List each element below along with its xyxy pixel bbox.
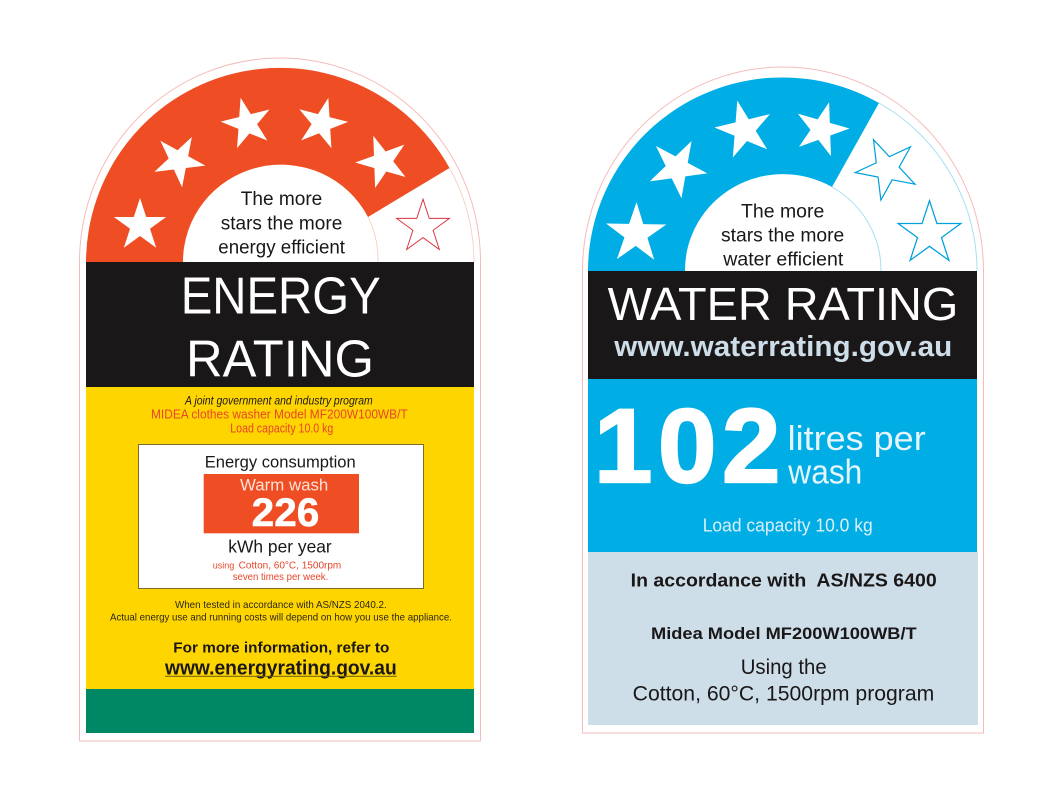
program and model text <box>151 395 408 435</box>
arc caption: stars the more <box>721 225 844 247</box>
arc caption: energy efficient <box>218 236 346 258</box>
outline star <box>397 199 449 249</box>
energy consumption box: seven times per week. <box>233 572 328 583</box>
program and model text: MIDEA clothes washer Model MF200W100WB/T <box>151 406 408 421</box>
energy consumption box: using <box>213 560 234 571</box>
black title band <box>588 271 977 379</box>
program and model text: A joint government and industry program <box>184 395 373 407</box>
panel: water rating label <box>582 67 984 733</box>
energy consumption box: kWh per year <box>228 537 332 557</box>
website reference: For more information, refer to <box>173 639 389 656</box>
water consumption figure: wash <box>787 453 862 491</box>
model: Midea Model MF200W100WB/T <box>651 625 917 643</box>
arc caption <box>721 201 844 271</box>
unfilled arc outline <box>368 168 474 262</box>
arc caption: water efficient <box>722 249 844 271</box>
test standard note: When tested in accordance with AS/NZS 2040.2. <box>175 599 387 611</box>
label outline <box>80 58 480 741</box>
program and model text: Load capacity 10.0 kg <box>230 421 333 435</box>
title <box>181 268 381 389</box>
energy consumption box: Energy consumption <box>205 452 356 471</box>
arc caption: The more <box>241 188 322 210</box>
energy consumption box: Cotton, 60°C, 1500rpm <box>239 561 341 572</box>
panel: energy rating label <box>80 58 480 741</box>
standard: In accordance with AS/NZS 6400 <box>631 570 937 591</box>
energy consumption box <box>138 444 424 588</box>
program: Using the <box>741 656 827 679</box>
title: WATER RATING <box>608 278 958 330</box>
label outline <box>582 67 984 733</box>
consumption figure <box>204 474 359 535</box>
yellow information panel <box>86 387 474 689</box>
test standard note: Actual energy use and running costs will depend on how you use the appliance. <box>110 611 452 623</box>
arc caption: stars the more <box>221 212 342 234</box>
website reference <box>164 639 397 680</box>
water consumption figure <box>594 388 926 505</box>
load capacity: Load capacity 10.0 kg <box>703 516 873 536</box>
star arc: blue rating band <box>588 77 879 271</box>
unfilled arc outline <box>832 103 977 271</box>
consumption figure: 226 <box>252 491 319 535</box>
program <box>633 656 934 706</box>
filled stars <box>114 92 415 248</box>
arc caption: The more <box>741 201 824 223</box>
water consumption figure: litres per <box>788 420 926 458</box>
blue consumption panel <box>588 379 977 552</box>
test standard note <box>110 599 452 623</box>
title: RATING <box>186 331 374 389</box>
arc caption <box>218 188 346 258</box>
filled stars <box>605 94 855 260</box>
outline stars <box>846 127 961 260</box>
water consumption figure: 102 <box>594 388 780 505</box>
pale blue details panel <box>588 552 978 725</box>
star arc: orange rating band <box>86 68 450 262</box>
consumption figure: Warm wash <box>240 476 328 494</box>
title: ENERGY <box>181 268 381 326</box>
website: www.waterrating.gov.au <box>613 331 952 363</box>
green footer band <box>86 689 474 733</box>
black title band <box>86 262 474 387</box>
website reference: www.energyrating.gov.au <box>164 658 397 680</box>
program: Cotton, 60°C, 1500rpm program <box>633 683 934 706</box>
